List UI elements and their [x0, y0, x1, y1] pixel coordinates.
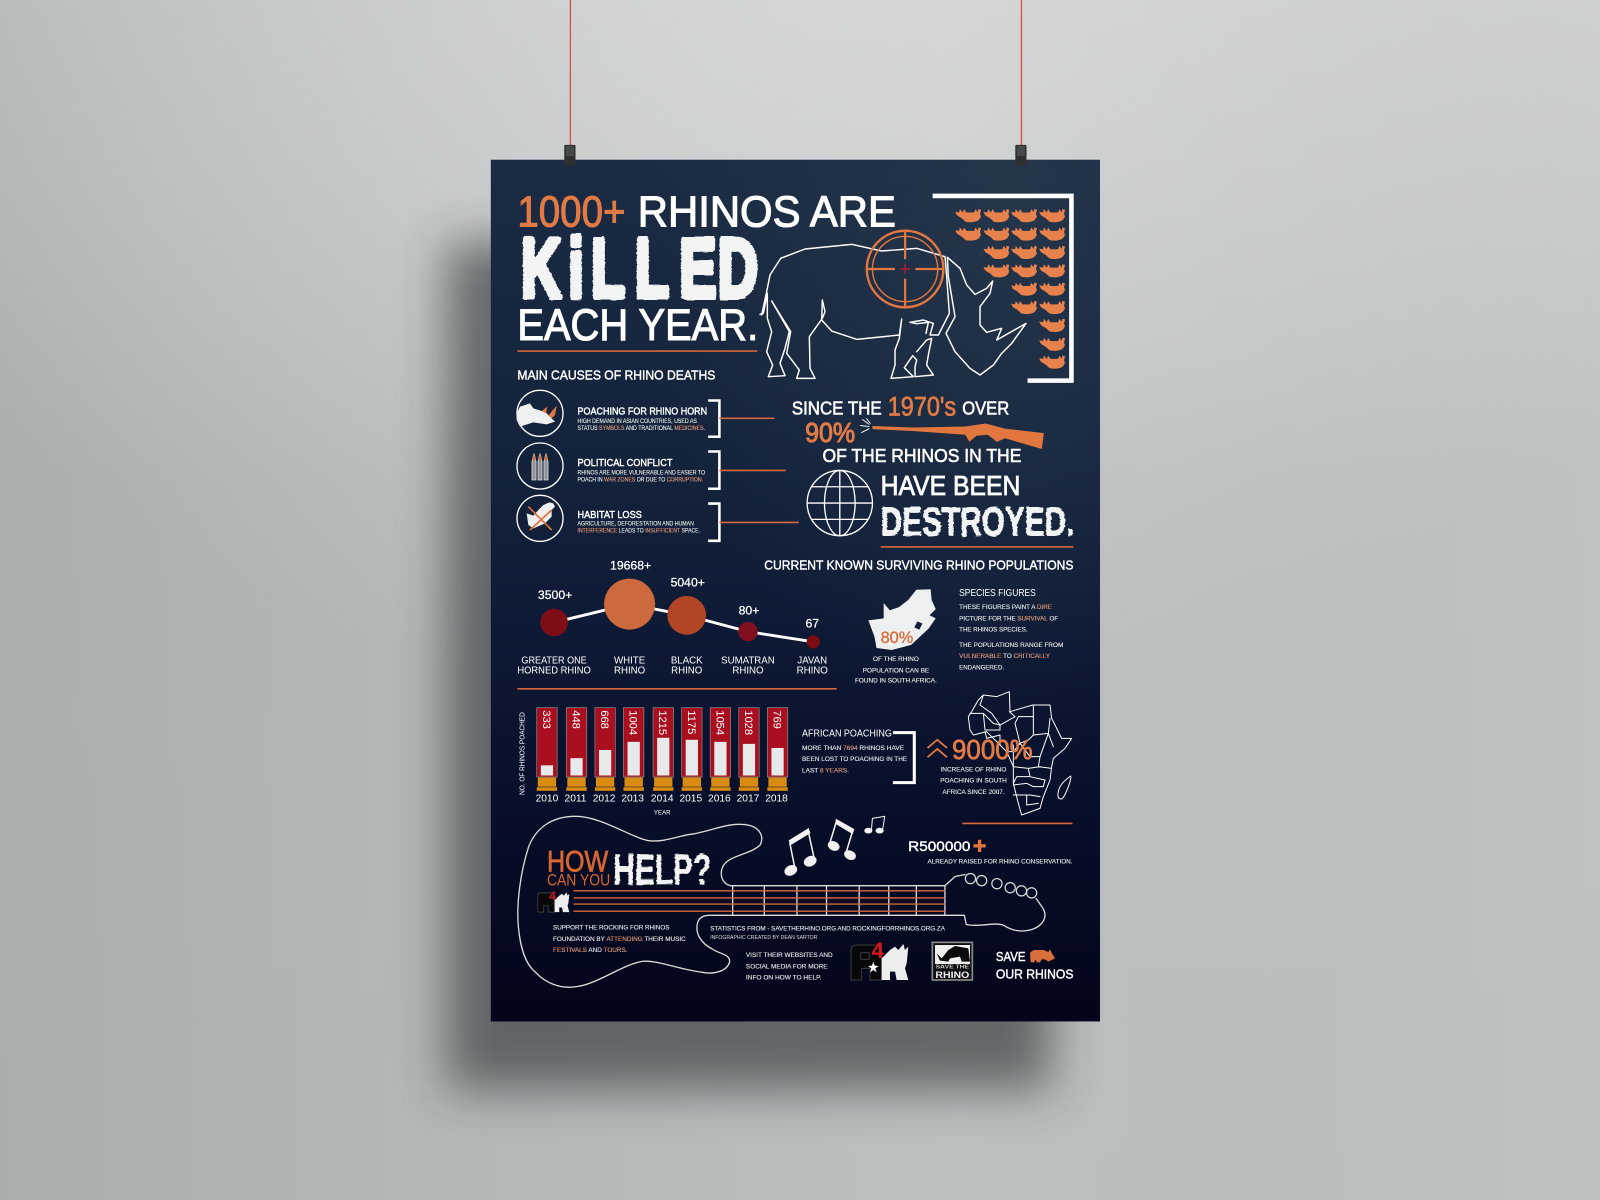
how can you help heading: CAN YOU — [547, 872, 610, 890]
icon: rifle — [872, 423, 1044, 449]
heading: main causes: MAIN CAUSES OF RHINO DEATHS — [517, 368, 715, 383]
visit text: VISIT THEIR WEBSITES AND — [746, 952, 833, 959]
cause: habitat loss — [517, 495, 799, 541]
statement: since the 1970's: HAVE BEEN — [881, 470, 1020, 501]
shell 2014 — [651, 708, 674, 805]
icon: globe — [807, 470, 872, 536]
africa map with 9000 percent: AFRICA SINCE 2007. — [942, 789, 1005, 796]
guitar outline with strings — [518, 816, 1045, 987]
rocking for rhinos logo — [851, 938, 908, 980]
shell 2015: 2015 — [679, 794, 702, 805]
save the rhino logo: SAVE THE — [936, 965, 970, 971]
save our rhinos — [996, 949, 1074, 982]
title: 1000+ — [517, 188, 626, 237]
statistics credit — [710, 926, 946, 941]
rhino outline with crosshair — [760, 230, 1026, 378]
crosshair — [866, 230, 944, 308]
small r4r logo — [538, 889, 569, 912]
bubble chart: populations: RHINO — [614, 665, 646, 676]
r500000 raised: R500000 — [908, 839, 970, 855]
african poaching text — [802, 729, 914, 783]
save the rhino logo: RHINO — [935, 970, 969, 980]
statistics credit: INFOGRAPHIC CREATED BY DEAN SARTOR — [710, 935, 818, 941]
cause: poaching for rhino horn: POACHING FOR RHINO HORN — [578, 406, 707, 417]
africa map with 9000 percent: 9000% — [952, 734, 1033, 765]
bracket — [893, 733, 914, 783]
poster shadow — [447, 243, 1051, 1090]
bubble chart: populations: SUMATRAN — [721, 655, 775, 666]
icon: bullets — [517, 443, 563, 489]
species figures: PICTURE FOR THE SURVIVAL OF — [959, 615, 1058, 622]
bubble chart: populations: 3500+ — [538, 588, 572, 602]
visit text — [746, 952, 833, 982]
species figures: VULNERABLE TO CRITICALLY — [959, 653, 1051, 660]
shell 2011: 448 — [569, 710, 581, 729]
south africa 80 percent: OF THE RHINO — [873, 656, 919, 663]
bracket — [708, 504, 719, 541]
save our rhinos: OUR RHINOS — [996, 967, 1074, 982]
south africa 80 percent: FOUND IN SOUTH AFRICA. — [855, 678, 937, 685]
cause: poaching for rhino horn — [517, 390, 774, 437]
bubble chart: populations: 5040+ — [671, 576, 705, 590]
bubble chart: populations: BLACK — [671, 655, 703, 666]
map: africa — [968, 692, 1072, 815]
heading: current populations: CURRENT KNOWN SURVIVING RHINO POPULATIONS — [764, 557, 1074, 572]
bubble chart: populations: 19668+ — [610, 558, 651, 572]
title: RHINOS ARE — [638, 188, 896, 237]
bubble chart: populations: 80+ — [739, 603, 759, 617]
shell 2010 — [536, 708, 559, 805]
cause: habitat loss: AGRICULTURE, DEFORESTATION AND HUMAN — [578, 521, 694, 528]
bubble chart: populations: RHINO — [797, 665, 828, 676]
how can you help heading: HOW — [547, 845, 608, 878]
cause: habitat loss: INTERFERENCE LEADS TO INSUFFICIENT SPACE. — [578, 528, 700, 535]
cause: habitat loss: HABITAT LOSS — [578, 510, 642, 521]
icon: crossed-out habitat map — [517, 495, 563, 541]
statement: since the 1970's: DESTROYED. — [881, 499, 1074, 545]
icon: south africa map — [868, 589, 936, 650]
how can you help heading: HELP? — [613, 846, 711, 895]
cause: political conflict: POLITICAL CONFLICT — [578, 458, 672, 469]
african poaching text: AFRICAN POACHING — [802, 729, 892, 740]
shell 2018: 769 — [770, 710, 782, 729]
africa map with 9000 percent: POACHING IN SOUTH — [940, 778, 1007, 785]
species figures: THE RHINOS SPECIES. — [959, 627, 1028, 634]
shell 2015 — [679, 708, 702, 805]
bracket — [708, 452, 719, 489]
shell 2015: 1175 — [685, 710, 697, 734]
save our rhinos: SAVE — [996, 949, 1026, 964]
african poaching text: MORE THAN 7694 RHINOS HAVE — [802, 745, 904, 752]
r500000 raised: ALREADY RAISED FOR RHINO CONSERVATION. — [928, 858, 1073, 865]
africa map with 9000 percent: INCREASE OF RHINO — [941, 766, 1006, 773]
cause: political conflict: RHINOS ARE MORE VULNERABLE AND EASIER TO — [578, 469, 705, 476]
shell 2010: 2010 — [536, 794, 559, 805]
save the rhino logo — [932, 942, 972, 980]
bubble chart: populations: HORNED RHINO — [517, 665, 591, 676]
species figures: ENDANGERED. — [959, 664, 1004, 671]
species figures: THESE FIGURES PAINT A DIRE — [959, 604, 1052, 611]
statement: since the 1970's: 1970's — [888, 391, 956, 421]
south africa 80 percent — [855, 589, 937, 685]
bracket — [708, 401, 719, 437]
how can you help heading — [547, 845, 711, 895]
rocking for rhinos logo: 4 — [872, 938, 885, 963]
guitar strings — [573, 891, 945, 911]
cause: political conflict: POACH IN WAR ZONES OR DUE TO CORRUPTION. — [578, 477, 703, 484]
shell 2010: 333 — [540, 710, 552, 729]
bubble chart: populations: WHITE — [614, 655, 646, 666]
shell 2012 — [593, 708, 616, 805]
bar chart: rhinos poached per year (shotgun shells) — [519, 708, 788, 816]
species figures: SPECIES FIGURES — [959, 588, 1036, 599]
support text: SUPPORT THE ROCKING FOR RHINOS — [553, 925, 669, 932]
icon: small rhino — [1030, 949, 1055, 962]
bubble chart: populations: GREATER ONE — [521, 655, 587, 666]
statement: since the 1970's: SINCE THE — [792, 397, 882, 418]
frame with rhino tally icons — [933, 196, 1071, 381]
bubble chart: populations: JAVAN — [797, 655, 827, 666]
shell 2016 — [708, 708, 731, 805]
title — [517, 188, 896, 351]
poster clips — [564, 145, 1027, 165]
shell 2016: 1054 — [713, 710, 725, 735]
visit text: INFO ON HOW TO HELP. — [746, 975, 822, 982]
statement: since the 1970's: OVER — [962, 397, 1009, 418]
visit text: SOCIAL MEDIA FOR MORE — [746, 963, 828, 970]
bubble chart: populations: RHINO — [671, 665, 703, 676]
cause: political conflict — [517, 443, 786, 489]
title: KiLLED — [521, 223, 758, 316]
bubble chart: populations — [517, 558, 837, 689]
shell 2012: 2012 — [593, 794, 616, 805]
species figures — [959, 588, 1063, 671]
y axis label: NO. OF RHINOS POACHED — [519, 712, 526, 795]
species figures: THE POPULATIONS RANGE FROM — [959, 642, 1063, 649]
shell 2011: 2011 — [565, 794, 587, 805]
statement: since the 1970's: OF THE RHINOS IN THE — [822, 445, 1021, 466]
icon: rhino head — [517, 390, 563, 436]
african poaching text: LAST 8 YEARS. — [802, 767, 849, 774]
shell 2012: 668 — [598, 710, 610, 729]
african poaching text: BEEN LOST TO POACHING IN THE — [802, 756, 907, 763]
icon: muzzle burst — [860, 418, 870, 433]
shell 2011 — [565, 708, 587, 805]
support text — [553, 925, 686, 954]
shell 2014: 1215 — [656, 710, 668, 735]
title: EACH YEAR. — [517, 299, 758, 350]
cause: poaching for rhino horn: HIGH DEMAND IN ASIAN COUNTRIES, USED AS — [578, 418, 697, 425]
shell 2017 — [737, 708, 760, 805]
poster panel — [491, 159, 1100, 1021]
statement: since the 1970's — [792, 391, 1074, 547]
shell 2013: 2013 — [621, 794, 644, 805]
bubble chart: populations: RHINO — [732, 665, 764, 676]
shell 2017: 2017 — [737, 794, 760, 805]
shell 2013 — [621, 708, 644, 805]
shell 2018 — [765, 708, 788, 805]
cause: poaching for rhino horn: STATUS SYMBOLS AND TRADITIONAL MEDICINES. — [578, 425, 705, 432]
tuning pegs — [965, 873, 1037, 898]
music notes — [783, 816, 885, 877]
shell 2014: 2014 — [651, 794, 674, 805]
statement: since the 1970's: 90% — [805, 417, 855, 448]
shell 2013: 1004 — [627, 710, 639, 735]
south africa 80 percent: POPULATION CAN BE — [863, 667, 929, 674]
r500000 raised — [908, 839, 1073, 865]
icon: up chevrons — [928, 740, 947, 757]
support text: FOUNDATION BY ATTENDING THEIR MUSIC — [553, 936, 686, 943]
support text: FESTIVALS AND TOURS. — [553, 947, 628, 954]
small r4r logo: 4 — [549, 889, 556, 903]
shell 2017: 1028 — [742, 710, 754, 735]
shell 2018: 2018 — [765, 794, 788, 805]
x axis label: YEAR — [654, 809, 671, 816]
hanging strings — [570, 0, 1021, 146]
statistics credit: STATISTICS FROM - SAVETHERHINO.ORG AND ROCKINGFORRHINOS.ORG.ZA — [710, 926, 946, 933]
africa map with 9000 percent — [928, 692, 1072, 823]
south africa 80 percent: 80% — [881, 629, 913, 647]
bubble chart: populations: 67 — [805, 617, 819, 631]
shell 2016: 2016 — [708, 794, 731, 805]
tally rhino icons — [955, 209, 1065, 369]
